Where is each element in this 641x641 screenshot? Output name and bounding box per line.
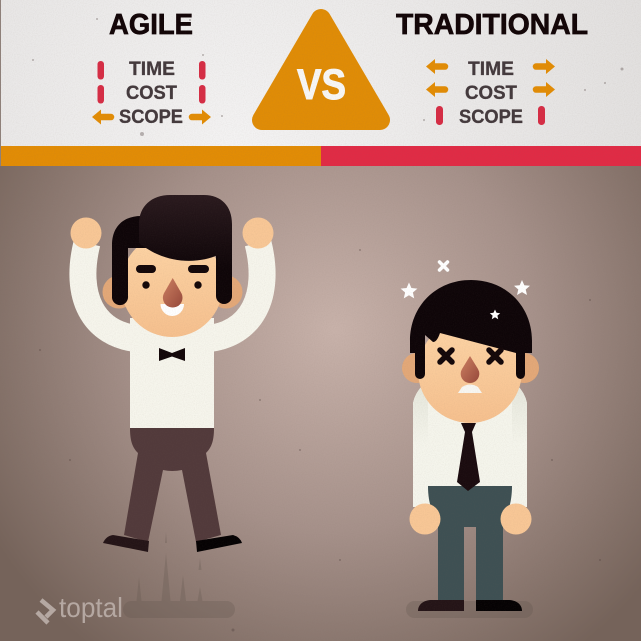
ground shadow: agile with motion spikes (123, 532, 235, 618)
heading: traditional: TRADITIONAL (396, 9, 588, 41)
trousers (428, 486, 512, 601)
agile constraints list: TIME (129, 58, 175, 80)
mouth (458, 384, 482, 393)
eyes: crosses (440, 350, 501, 362)
ears (102, 276, 242, 308)
header panel (0, 0, 641, 166)
nose (461, 356, 479, 383)
sleeve shading (413, 385, 527, 445)
logo: toptal: toptal (59, 592, 123, 623)
bar: traditional red (321, 146, 641, 166)
shirt (413, 385, 527, 507)
face (121, 233, 223, 337)
necktie (457, 423, 480, 491)
left shoe (418, 600, 464, 611)
trousers (124, 428, 221, 542)
hair (410, 280, 532, 379)
dizzy stars (401, 262, 530, 319)
bar: agile orange (1, 146, 321, 166)
heading: agile: AGILE (109, 9, 193, 41)
eyebrows (136, 265, 209, 273)
ears (402, 353, 539, 383)
agile constraints list: COST (126, 82, 177, 104)
character: traditional man dazed (401, 262, 539, 611)
right shoe (476, 600, 522, 611)
agile constraints list: SCOPE (119, 106, 183, 128)
face (418, 319, 522, 423)
traditional constraints list: COST (465, 82, 517, 104)
arms raised (83, 243, 262, 339)
traditional constraints list: SCOPE (459, 106, 523, 128)
hair (112, 195, 232, 305)
torso (130, 318, 214, 429)
hands (410, 504, 532, 534)
hands (70, 218, 274, 248)
character: agile man jumping (70, 195, 274, 552)
smile (160, 304, 184, 316)
traditional constraints list (426, 58, 555, 128)
left shoe (103, 535, 149, 552)
background (0, 166, 641, 641)
nose (163, 278, 182, 307)
ground shadow: traditional (406, 601, 533, 618)
bow tie (159, 348, 185, 361)
right shoe (196, 535, 242, 552)
agile constraints list (92, 58, 211, 128)
vs triangle (262, 19, 380, 120)
traditional constraints list: TIME (468, 58, 514, 80)
eyes (142, 281, 202, 289)
vs triangle: VS (297, 61, 346, 109)
